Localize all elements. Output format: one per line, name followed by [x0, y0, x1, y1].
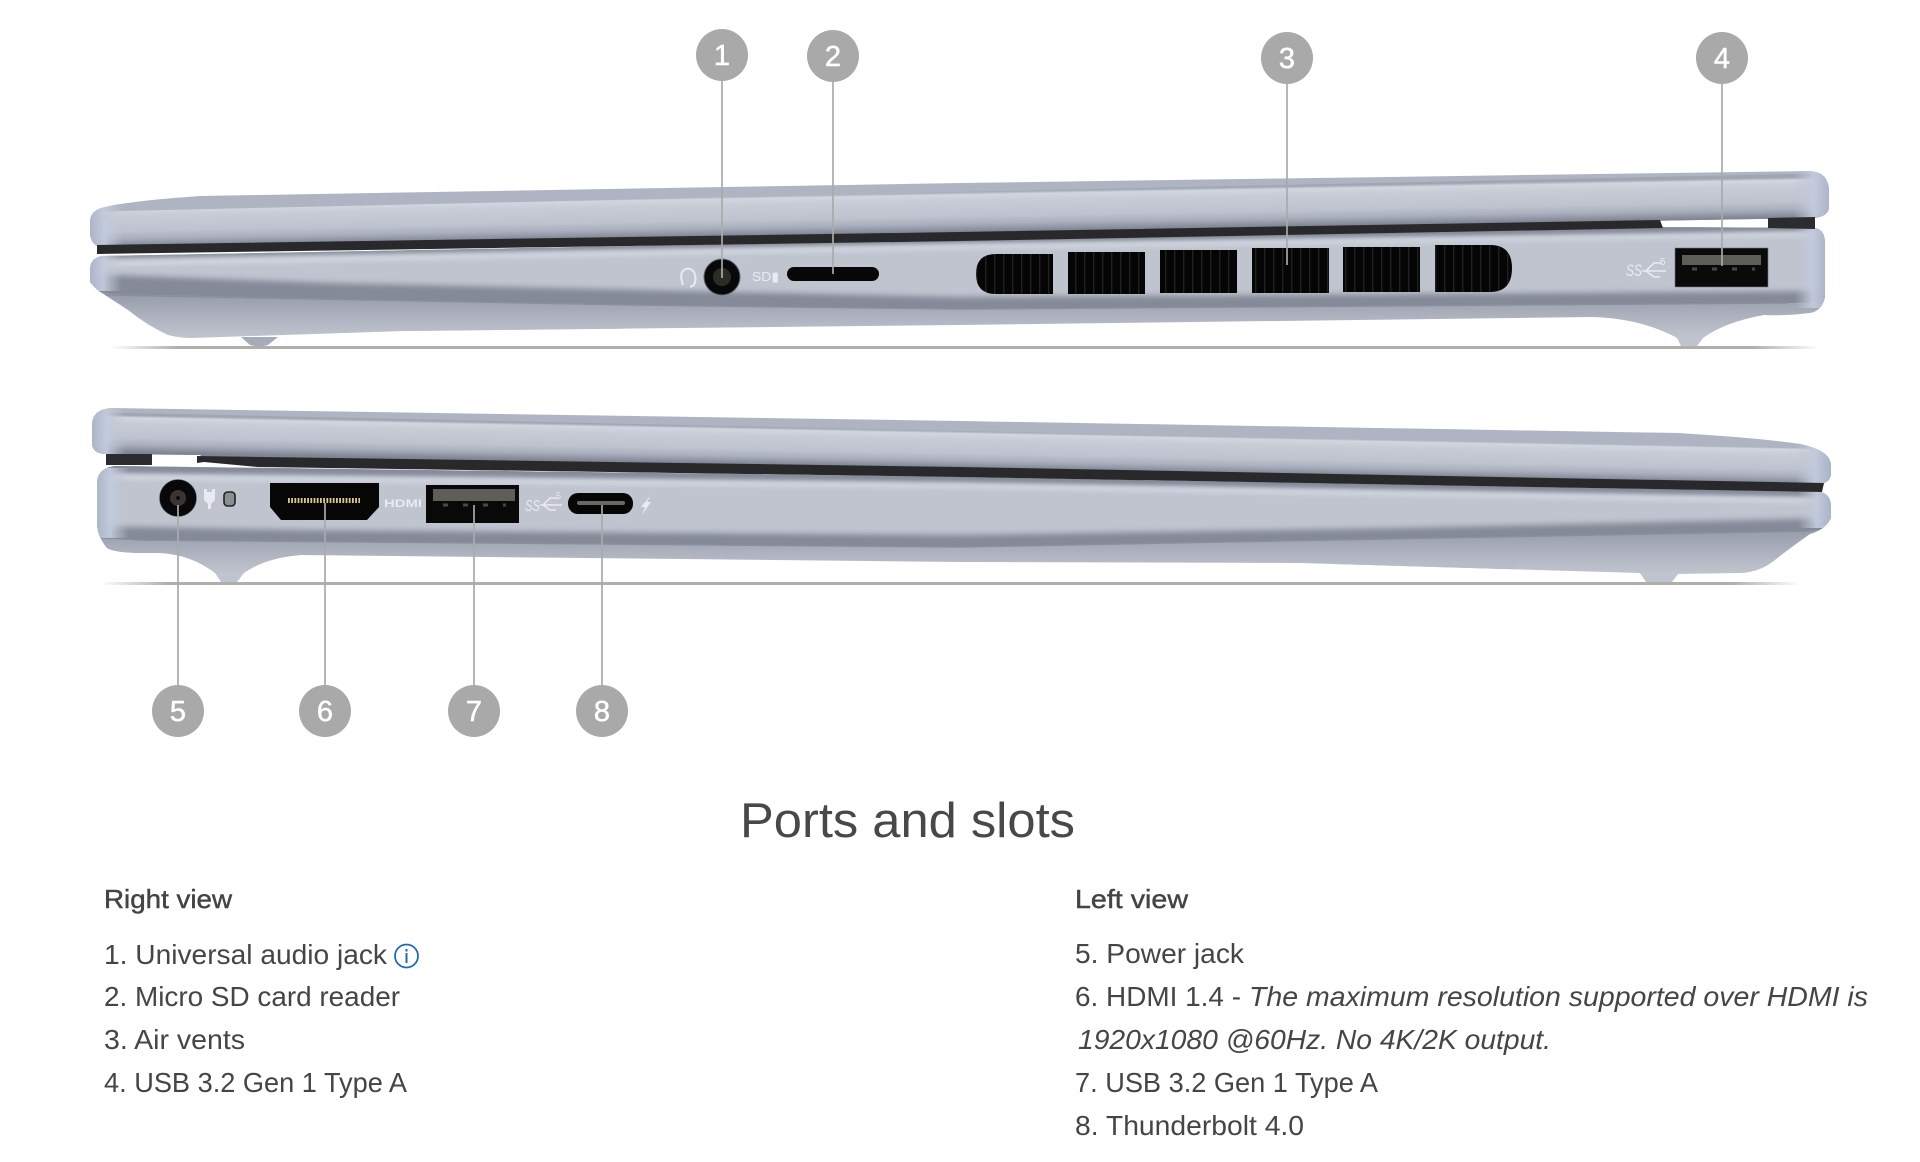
heading: right view: Right view	[104, 884, 232, 914]
air vents	[976, 245, 1512, 294]
callout 4: 4	[1714, 43, 1730, 75]
callout 8: 8	[594, 696, 610, 728]
callout 5	[152, 505, 204, 737]
callout 1	[696, 29, 748, 278]
item 6: 1920x1080 @60Hz. No 4K/2K output.	[1078, 1024, 1551, 1055]
Thunderbolt icon	[641, 495, 651, 515]
item 2: 2. Micro SD card reader	[104, 981, 400, 1012]
callout 5: 5	[170, 696, 186, 728]
ground shadow line	[110, 346, 1820, 349]
laptop lid	[92, 408, 1831, 484]
power jack	[160, 480, 196, 516]
item 5: 5. Power jack	[1075, 938, 1245, 969]
image: right view of laptop	[80, 165, 1835, 349]
title: Ports and slots	[740, 794, 1075, 848]
item 3: 3. Air vents	[104, 1024, 245, 1055]
callout 3: 3	[1279, 43, 1295, 75]
icon: info	[395, 944, 418, 968]
callout 7	[448, 505, 500, 737]
image: left view of laptop	[80, 400, 1835, 585]
callout 6	[299, 503, 351, 737]
laptop base	[90, 460, 1835, 585]
ground shadow line	[100, 582, 1800, 585]
item 7: 7. USB 3.2 Gen 1 Type A	[1075, 1067, 1378, 1098]
HDMI port	[270, 483, 379, 520]
USB SuperSpeed logo: SS	[1626, 261, 1642, 280]
callout 3	[1261, 32, 1313, 265]
item 8: 8. Thunderbolt 4.0	[1075, 1110, 1304, 1141]
callout 1: 1	[714, 40, 730, 72]
USB-A port	[1675, 248, 1768, 287]
callout 8	[576, 505, 628, 737]
hinge gap	[106, 454, 152, 465]
callout 6: 6	[317, 696, 333, 728]
USB SuperSpeed logo: SS	[525, 498, 540, 515]
callout 7: 7	[466, 696, 482, 728]
item 6	[1075, 981, 1868, 1055]
panel: right view list	[104, 884, 418, 1098]
USB-A port	[426, 485, 519, 523]
USB SuperSpeed logo	[1626, 257, 1666, 280]
callout 4	[1696, 32, 1748, 266]
item 6: 6. HDMI 1.4 -	[1075, 981, 1241, 1012]
laptop base	[85, 222, 1830, 347]
USB SuperSpeed logo: 5	[556, 491, 561, 501]
item 1: 1. Universal audio jack	[104, 939, 388, 970]
USB SuperSpeed logo: 5	[1660, 257, 1666, 268]
USB SuperSpeed logo	[525, 491, 562, 515]
rubber foot left	[241, 337, 278, 347]
headphone icon	[681, 268, 696, 287]
callout 2	[807, 30, 859, 274]
heading: left view: Left view	[1075, 884, 1188, 914]
power plug icon	[204, 489, 215, 509]
SD label: SD▮	[752, 269, 779, 284]
USB-C Thunderbolt port	[568, 493, 633, 514]
hinge gap	[97, 220, 1663, 254]
item 6: The maximum resolution supported over HDMI is	[1249, 981, 1868, 1012]
laptop lid	[90, 171, 1829, 246]
panel: left view list	[1075, 884, 1868, 1141]
micro SD slot	[787, 267, 879, 281]
callout 2: 2	[825, 41, 841, 73]
audio jack	[704, 259, 740, 295]
item 4: 4. USB 3.2 Gen 1 Type A	[104, 1067, 407, 1098]
status LED	[224, 492, 235, 506]
HDMI label: HDMI	[384, 498, 422, 510]
